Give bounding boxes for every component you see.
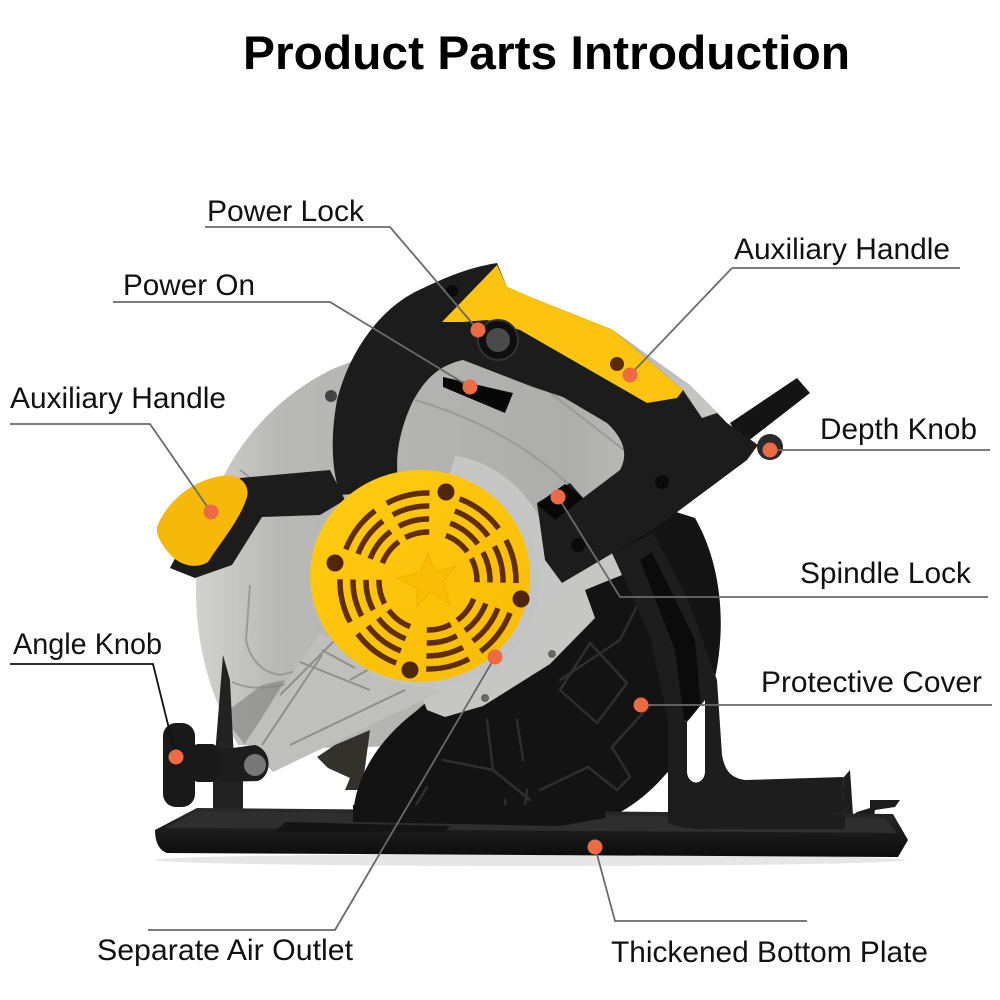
plate top surface	[165, 811, 897, 833]
label: Power On: Power On	[123, 269, 255, 302]
label: Separate Air Outlet: Separate Air Outlet	[97, 934, 354, 967]
depth rod	[730, 378, 810, 445]
grip screw	[610, 357, 624, 371]
yellow front grip	[157, 476, 248, 566]
saw illustration	[155, 263, 908, 866]
bracket gap	[640, 552, 702, 720]
yellow motor cap	[310, 470, 530, 682]
housing inner panels	[232, 385, 650, 688]
label: Auxiliary Handle right: Auxiliary Handle	[734, 233, 950, 266]
power button	[478, 320, 518, 360]
housing screw	[325, 390, 337, 402]
motor housing rim	[316, 475, 540, 687]
depth knob	[757, 434, 783, 460]
grey cone arm	[245, 633, 440, 772]
motor vents	[314, 467, 542, 695]
housing bolts	[481, 650, 556, 702]
rear handle loop	[333, 263, 758, 583]
guide bracket	[613, 533, 845, 827]
angle knob	[163, 723, 217, 807]
label: Power Lock: Power Lock	[207, 195, 365, 228]
label: Auxiliary Handle left: Auxiliary Handle	[10, 382, 226, 415]
label: Spindle Lock: Spindle Lock	[800, 557, 972, 590]
orange markers	[168, 322, 778, 854]
label: Thickened Bottom Plate: Thickened Bottom Plate	[611, 936, 928, 969]
trigger	[443, 377, 513, 413]
yellow grip	[442, 265, 683, 403]
label: Angle Knob: Angle Knob	[13, 628, 162, 661]
bracket foot base	[668, 800, 845, 829]
pivot screw	[244, 754, 266, 776]
base plate	[155, 808, 908, 857]
handle screws	[326, 285, 669, 552]
housing shadow	[222, 680, 285, 745]
motor star	[397, 553, 456, 607]
base plate shadow	[155, 854, 905, 866]
plate inner ledge	[275, 822, 450, 832]
angle bracket blade	[213, 655, 243, 812]
black protective cover	[353, 510, 721, 833]
title: Product Parts Introduction	[243, 26, 850, 79]
label: Depth Knob: Depth Knob	[820, 413, 977, 446]
blade teeth	[317, 730, 370, 790]
angle pivot	[217, 745, 269, 782]
cover ribs	[407, 600, 650, 822]
spindle lock button	[537, 484, 583, 520]
bracket slot	[687, 700, 705, 782]
depth clamp and wing nut	[843, 770, 900, 832]
motor screws	[326, 484, 530, 678]
grey blade housing	[196, 333, 725, 748]
front handle arm	[170, 470, 345, 578]
label: Protective Cover: Protective Cover	[761, 666, 982, 699]
grey motor housing	[400, 456, 622, 717]
leader lines	[10, 227, 992, 930]
cover base	[353, 805, 605, 826]
